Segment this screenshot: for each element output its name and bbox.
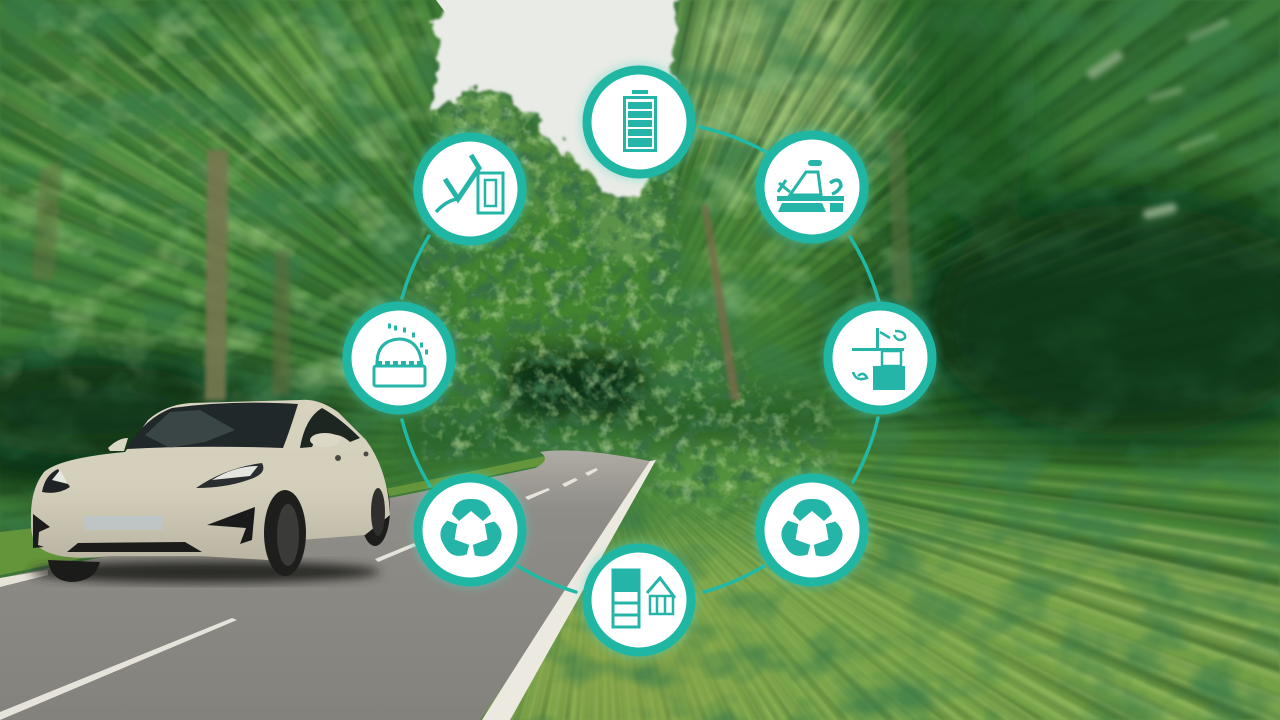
icon: battery and house (613, 570, 675, 627)
node: car pack dome (340, 299, 458, 417)
grass verge left of road (0, 455, 550, 575)
sky (432, 0, 680, 196)
bright highlights through the far-right trees (1092, 22, 1225, 214)
windshield reflections (145, 410, 235, 448)
left headlight (42, 469, 70, 493)
intake left (33, 514, 50, 548)
windshield (126, 403, 298, 449)
node: home energy storage (580, 541, 698, 659)
central forest (396, 86, 844, 522)
road edge line: right (482, 460, 656, 720)
front left tyre (48, 560, 100, 582)
road edge line: left (0, 570, 48, 587)
node: battery check (411, 130, 529, 248)
door mirror (108, 438, 128, 451)
rear wheel (360, 474, 390, 546)
icon: recycle arrows (434, 499, 507, 563)
road (0, 450, 656, 720)
icon: recycle arrows (775, 499, 848, 563)
connector ring (402, 127, 879, 592)
icon: dome module (374, 326, 428, 386)
node: second-life reuse (821, 299, 939, 417)
side window (300, 408, 360, 448)
intake right (207, 507, 255, 544)
car (30, 400, 390, 583)
number plate (84, 516, 163, 530)
icon: assembly station (852, 328, 905, 390)
icon: battery (623, 90, 657, 152)
node: recycling left (411, 471, 529, 589)
icon: check mark with battery (436, 155, 503, 213)
lower grille (67, 542, 202, 552)
car shadow (30, 561, 380, 583)
node: recycling right (753, 471, 871, 589)
car body (31, 400, 390, 560)
node: battery factory (753, 128, 871, 246)
node: battery cell (580, 63, 698, 181)
side mirror (310, 433, 340, 447)
front wheel (264, 490, 306, 576)
right headlight (196, 463, 263, 488)
lane markings (0, 468, 598, 720)
tree trunks (32, 130, 912, 400)
door handles (335, 452, 368, 461)
icon: factory line (777, 160, 844, 212)
dark depth of the far-right and lower-left forest (0, 0, 1280, 455)
